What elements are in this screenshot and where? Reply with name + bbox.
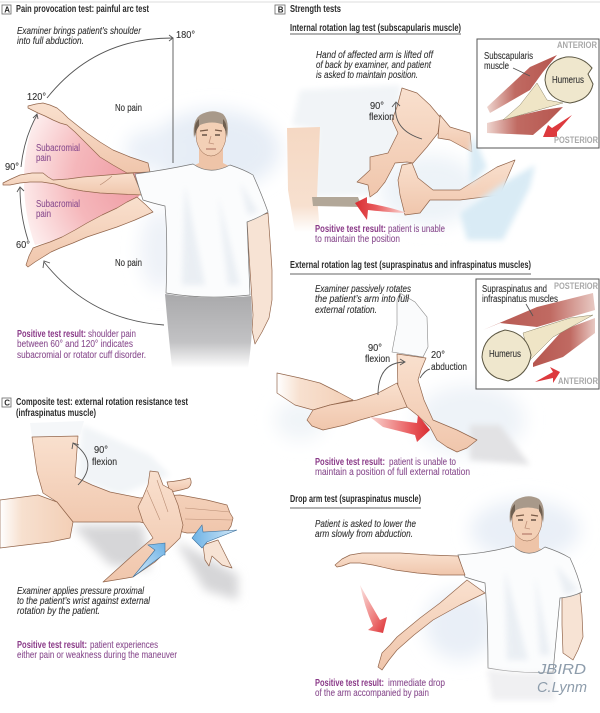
- positive result C: [17, 640, 178, 661]
- positive result B2: [315, 457, 470, 478]
- flexion arc B1: [392, 102, 422, 139]
- flexion label B1: [369, 101, 394, 123]
- instruction text B2: external rotation.: [315, 305, 377, 316]
- t-shirt shading: [505, 565, 578, 660]
- internal rotation lag test: [287, 23, 599, 245]
- grey trousers and shirt shading C: [72, 425, 238, 600]
- panel C: external rotation resistance test: [0, 397, 238, 661]
- sleeve: [30, 421, 84, 437]
- flexion and abduction labels B2: 20°: [431, 350, 445, 361]
- arc arrows and degree lines: [17, 35, 173, 325]
- horizontal arm: [3, 173, 142, 195]
- positive result drop arm: of the arm accompanied by pain: [315, 688, 429, 699]
- red arrow B1: [355, 197, 407, 220]
- blue arrow right: [192, 525, 237, 548]
- heading C: (infraspinatus muscle): [16, 408, 96, 419]
- blue arrow lower: [133, 543, 165, 577]
- flexion and abduction labels B2: 90°: [368, 343, 382, 354]
- raised arm: [28, 103, 150, 173]
- flexion arc C: [72, 443, 88, 485]
- inset: subscapularis: [477, 39, 599, 148]
- instruction text B2: the patient’s arm into full: [315, 294, 410, 305]
- instruction text A: [17, 26, 142, 47]
- flexion label C: [92, 445, 117, 468]
- subacromial pain labels: Subacromial: [36, 143, 80, 154]
- patient thumb: [167, 478, 191, 492]
- positive result A: Positive test result:: [17, 329, 86, 340]
- scapula: [503, 83, 563, 120]
- t-shirt: [458, 546, 582, 672]
- panel A: painful arc test: [2, 4, 280, 368]
- instruction text drop arm: arm slowly from abduction.: [315, 529, 413, 540]
- inset arrow: [543, 115, 572, 137]
- instruction text drop arm: [315, 519, 416, 540]
- angle labels: 60°: [16, 240, 30, 251]
- heading B: Strength tests: [290, 4, 341, 15]
- subacromial pain labels: Subacromial: [36, 199, 80, 210]
- subheading internal: Internal rotation lag test (subscapularis muscle): [290, 23, 461, 34]
- instruction text B1: [316, 50, 434, 81]
- instruction text B1: Hand of affected arm is lifted off: [316, 50, 434, 61]
- patient right arm: [562, 593, 583, 660]
- examiner upper hand and forearm: [103, 471, 183, 582]
- artist signature: JBIRD: [537, 661, 586, 678]
- belt: [312, 197, 362, 207]
- inset labels: [484, 40, 598, 145]
- flexion arc B2: [378, 359, 430, 395]
- patient left arm: [287, 127, 320, 232]
- flexion and abduction labels B2: abduction: [431, 362, 467, 373]
- bone shaft: [523, 315, 593, 360]
- lowered arm: [26, 197, 153, 267]
- positive result drop arm: immediate drop: [388, 678, 445, 689]
- red arrow B2: [370, 415, 430, 442]
- t-shirt: [135, 164, 268, 297]
- examiner blue shirt: [460, 135, 535, 240]
- positive result C: patient experiences: [90, 640, 158, 651]
- no pain labels: [115, 103, 142, 269]
- muscle upper: [487, 55, 557, 113]
- mist B2: [275, 385, 525, 455]
- pink subacromial pain wedge: [24, 113, 148, 245]
- subacromial pain labels: pain: [36, 209, 51, 220]
- positive result B1: Positive test result:: [315, 224, 386, 235]
- positive result B2: maintain a position of full external rotation: [315, 467, 470, 478]
- flexion label C: 90°: [94, 445, 108, 456]
- inset labels: Humerus: [552, 75, 584, 86]
- examiner forearm upper: [438, 115, 472, 152]
- flexion label B1: 90°: [370, 101, 384, 112]
- inset labels: Supraspinatus and: [482, 284, 547, 295]
- instruction text B2: Examiner passively rotates: [315, 284, 411, 295]
- inset: supraspinatus and infraspinatus: [476, 279, 599, 389]
- positive result B1: [315, 224, 445, 245]
- positive result A: shoulder pain: [88, 329, 136, 340]
- no pain labels: No pain: [115, 103, 142, 114]
- heading C: [16, 397, 188, 419]
- inset arrow: [535, 367, 560, 383]
- angle labels: 120°: [27, 92, 46, 103]
- hand creases: [147, 480, 168, 520]
- sleeve: [392, 293, 428, 357]
- flexion label B1: flexion: [369, 112, 394, 123]
- red arrow drop arm: [360, 585, 387, 633]
- lower muscle: [533, 318, 595, 367]
- inset labels: Subscapularis: [484, 51, 533, 62]
- mist B3: [425, 500, 580, 660]
- patient head: [191, 111, 231, 172]
- top muscle: [483, 293, 595, 330]
- panel letter C: [2, 398, 11, 407]
- flexion label C: flexion: [92, 457, 117, 468]
- instruction text A: Examiner brings patient’s shoulder: [17, 26, 142, 37]
- examiner hand and lower arm: [398, 160, 515, 215]
- instruction text B2: [315, 284, 411, 316]
- positive result A: between 60° and 120° indicates: [17, 339, 133, 350]
- instruction text C: to the patient’s wrist against external: [17, 596, 151, 607]
- subacromial pain labels: [36, 143, 80, 220]
- forearm crease: [100, 176, 112, 185]
- inset labels: muscle: [484, 61, 509, 72]
- artist signature: [537, 661, 587, 696]
- patient left fingers below: [203, 540, 232, 568]
- inset labels: [482, 281, 598, 386]
- panel letter A: [2, 5, 11, 14]
- examiner forearm: [277, 373, 353, 410]
- instruction text A: into full abduction.: [17, 36, 84, 47]
- positive result B1: to maintain the position: [315, 234, 400, 245]
- finger lines: [185, 508, 232, 520]
- patient shirt: [292, 85, 400, 197]
- angle labels: 90°: [5, 162, 19, 173]
- drop arm test: [290, 494, 587, 700]
- flexion and abduction labels B2: [365, 343, 467, 373]
- positive result drop arm: [315, 678, 445, 699]
- instruction text B1: is asked to maintain position.: [316, 70, 418, 81]
- mist B1: [380, 155, 480, 225]
- angle labels: [5, 30, 195, 251]
- flexion and abduction labels B2: flexion: [365, 354, 390, 365]
- muscle pointer: [513, 68, 530, 76]
- patient arm: [32, 436, 233, 533]
- positive result drop arm: Positive test result:: [315, 678, 384, 689]
- subacromial pain labels: pain: [36, 153, 51, 164]
- positive result B1: patient is unable: [388, 224, 445, 235]
- panel letter C: C: [4, 398, 10, 407]
- humerus head: [545, 57, 593, 103]
- instruction text C: Examiner applies pressure proximal: [17, 586, 145, 597]
- patient upper arm and forearm: [397, 354, 477, 452]
- heading A: Pain provocation test: painful arc test: [16, 4, 149, 15]
- positive result B2: Positive test result:: [315, 457, 385, 468]
- background mist behind patient: [125, 110, 280, 290]
- instruction text drop arm: Patient is asked to lower the: [315, 519, 416, 530]
- panel letter B: B: [278, 5, 284, 14]
- subheading drop arm: Drop arm test (supraspinatus muscle): [290, 494, 421, 505]
- patient right arm: [247, 213, 272, 344]
- subheading drop arm: [290, 494, 421, 508]
- patient wrist and hand: [307, 383, 407, 430]
- heading C: Composite test: external rotation resistance test: [16, 397, 188, 408]
- instruction text B1: of back by examiner, and patient: [316, 60, 432, 71]
- trouser shade: [470, 425, 530, 465]
- inset labels: infraspinatus muscles: [482, 294, 558, 305]
- positive result A: subacromial or rotator cuff disorder.: [17, 350, 146, 361]
- external rotation lag test: [275, 260, 599, 478]
- trousers: [487, 669, 555, 700]
- horizontal arm: [335, 553, 465, 575]
- patient head: [507, 496, 547, 556]
- instruction text C: [17, 586, 151, 617]
- panel letter B: [275, 5, 285, 14]
- instruction text C: rotation by the patient.: [17, 606, 100, 617]
- inset labels: Humerus: [489, 349, 521, 360]
- panel B: strength tests: [275, 4, 599, 700]
- positive result C: Positive test result:: [17, 640, 87, 651]
- positive result A: [17, 329, 146, 361]
- angle labels: 180°: [176, 30, 195, 41]
- muscle pointer: [526, 304, 533, 316]
- positive result C: either pain or weakness during the maneuver: [17, 650, 178, 661]
- panel letter A: A: [4, 5, 10, 14]
- humerus head: [482, 330, 531, 381]
- t-shirt shading: [182, 182, 258, 285]
- examiner lower hand: [0, 495, 73, 548]
- positive result B2: patient is unable to: [389, 457, 456, 468]
- no pain labels: No pain: [115, 258, 142, 269]
- grey trousers: [165, 294, 252, 368]
- dropped arm: [378, 580, 485, 670]
- artist signature: C.Lynm: [537, 679, 587, 696]
- muscle lower: [487, 107, 563, 135]
- patient arm and hand: [357, 88, 440, 197]
